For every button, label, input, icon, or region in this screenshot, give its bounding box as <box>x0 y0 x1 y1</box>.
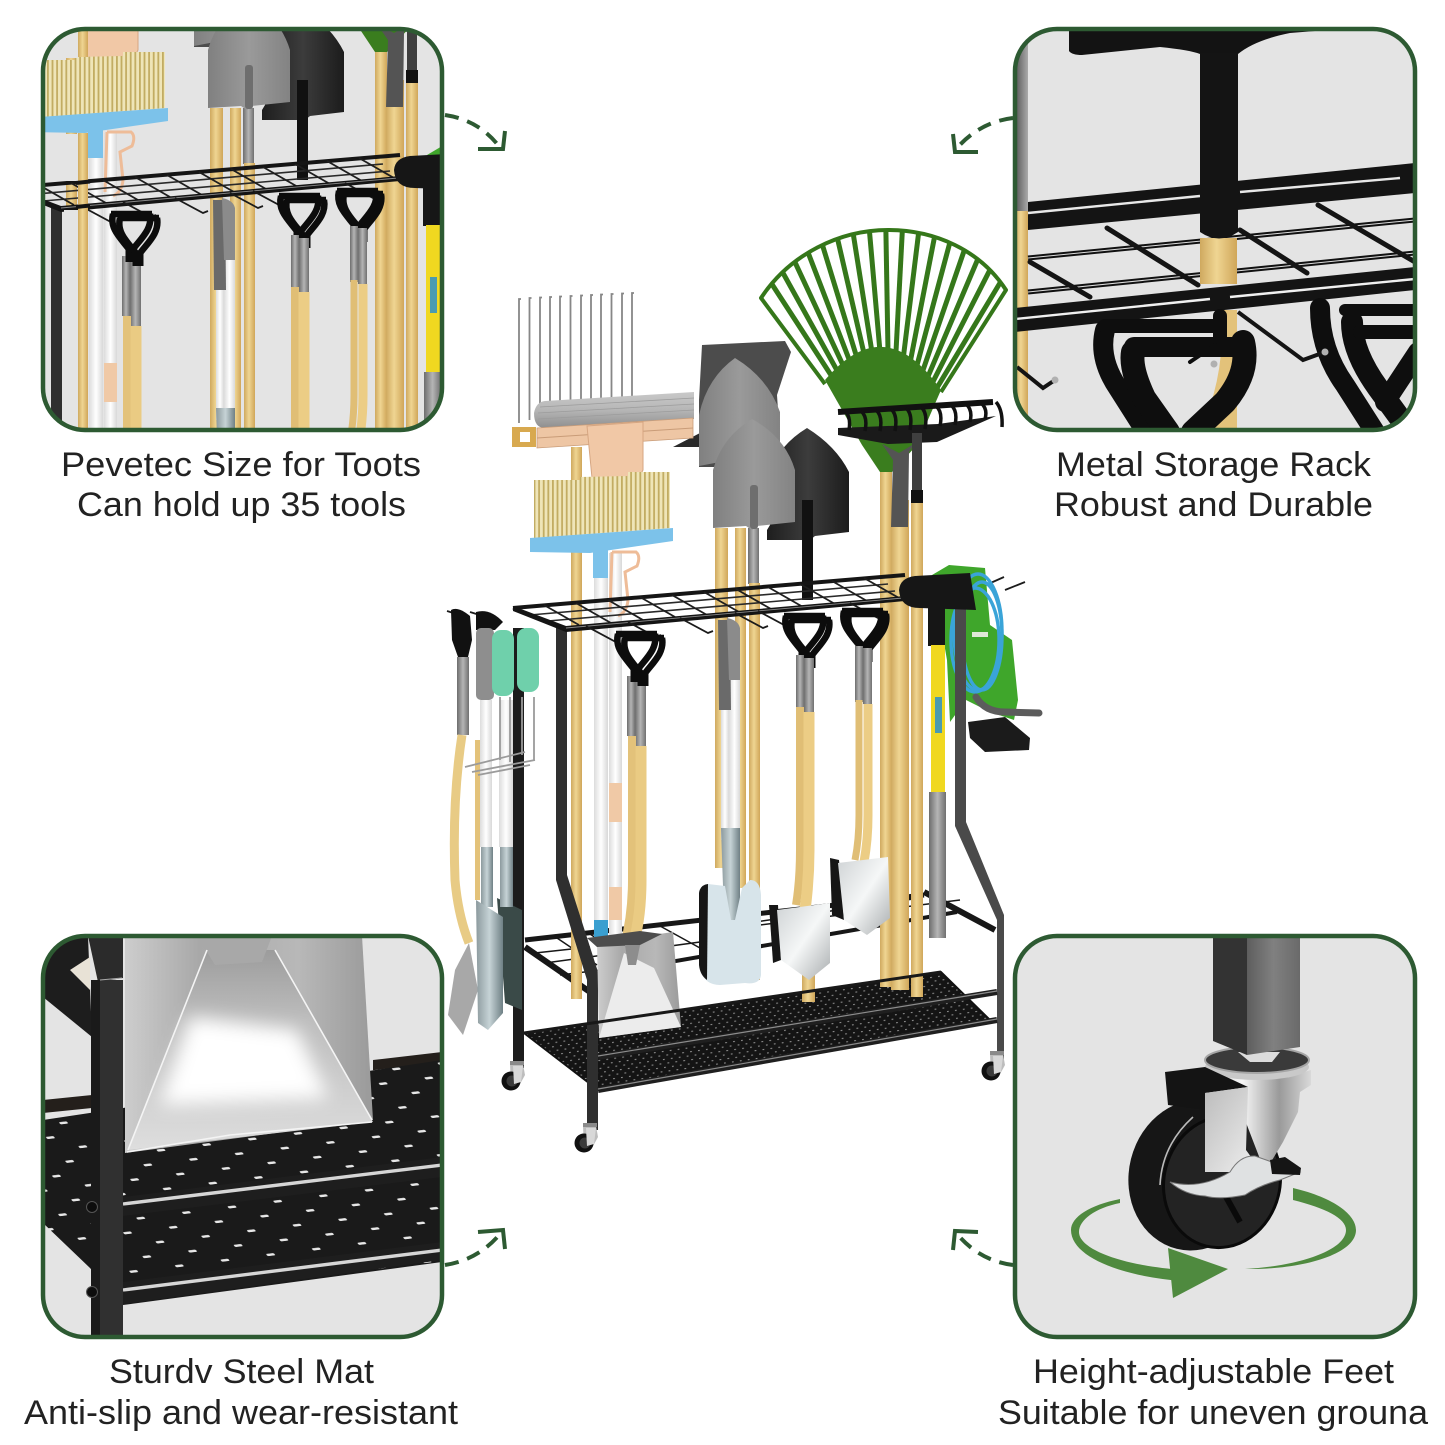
rear left upright <box>513 628 524 1068</box>
lower shelf front rail one <box>598 991 997 1057</box>
rake outline <box>761 230 1006 392</box>
panel border <box>1015 936 1415 1337</box>
front rail highlight <box>1015 279 1415 319</box>
peach mop clamp bar <box>537 418 693 448</box>
panel border <box>43 29 442 430</box>
back frame corner <box>43 936 92 1037</box>
front rail one highlight <box>123 1165 442 1204</box>
peach and white pole <box>609 553 622 938</box>
upper grey shovel <box>699 358 780 466</box>
caster right <box>982 1051 1005 1080</box>
front rail one <box>149 1168 432 1205</box>
pointed spade handle set <box>830 611 890 935</box>
shovel centre face <box>128 950 373 1150</box>
arrow: bottom left dashed <box>445 1230 505 1265</box>
caption: top left <box>61 446 421 524</box>
washer label <box>972 632 988 637</box>
green rotation arc right <box>1245 1188 1356 1269</box>
wooden pole section <box>1017 211 1028 415</box>
caption: bottom right: Height-adjustable Feet <box>1033 1353 1395 1391</box>
black rake head <box>838 402 1002 444</box>
rake fork neck <box>882 444 914 527</box>
panel: size detail top left <box>40 26 444 432</box>
shovel front <box>599 953 681 1038</box>
wooden pole in crop <box>78 29 88 430</box>
left hanging tool A <box>448 609 478 1035</box>
galvanised socket <box>721 828 740 935</box>
socket tray <box>587 931 662 947</box>
front rail <box>1015 267 1415 332</box>
center shovel: big square shovel with handles <box>587 634 681 1038</box>
rear rail highlight <box>373 1068 385 1070</box>
wheel face <box>1150 1104 1294 1260</box>
black bracket <box>899 573 976 610</box>
gold bracket <box>512 427 536 447</box>
D grip left <box>1103 316 1245 432</box>
panel border <box>1015 29 1415 430</box>
wood handle under rail <box>1212 310 1237 428</box>
rear mat rails <box>43 1052 442 1113</box>
blue broom head <box>530 528 673 578</box>
caster rear left <box>502 1061 525 1090</box>
wood below shaft <box>1200 238 1237 284</box>
light gap in back frame <box>70 957 90 990</box>
arrow: top right dashed <box>953 118 1013 152</box>
dark dustpan shovel <box>699 341 791 467</box>
caption: top left: Pevetec Size for Toots <box>61 446 421 484</box>
tall wooden poles <box>880 470 923 997</box>
wooden handle behind broom <box>571 447 582 999</box>
broom bristles <box>534 472 670 538</box>
arrow: bottom right dashed <box>953 1231 1013 1265</box>
green rotation arrowhead <box>1168 1248 1228 1298</box>
arrow: top left dashed <box>445 115 505 149</box>
rake solid base <box>825 347 941 472</box>
brake lever <box>1170 1156 1301 1198</box>
front rail of top shelf <box>513 596 905 632</box>
washer black foot <box>968 717 1030 752</box>
caster front <box>574 1123 598 1152</box>
front rail two highlight <box>123 1250 442 1290</box>
main product: tool storage rack <box>447 150 1053 1153</box>
back rail highlight <box>1028 178 1400 213</box>
perforated mat <box>43 1060 442 1305</box>
rake pole upper <box>911 433 923 503</box>
peach loop hook <box>610 552 639 616</box>
panel: metal rack close-up top right <box>1015 29 1418 432</box>
blue pole cap <box>594 920 608 938</box>
close-up scene <box>1015 936 1415 1337</box>
lower grey shovel <box>713 419 795 530</box>
mop roller <box>534 392 694 428</box>
caption: bottom left: Anti-slip and wear-resistant <box>24 1394 459 1432</box>
rear rails of lower shelf <box>524 972 941 1033</box>
square post <box>88 936 123 1337</box>
D grip right <box>1320 308 1418 432</box>
rake tines <box>771 232 1001 388</box>
shafts behind the lower grey shovel <box>715 528 760 980</box>
front rail two <box>123 1246 440 1297</box>
D grip <box>616 634 657 682</box>
panel: caster close-up bottom right <box>1015 936 1415 1337</box>
washer plate <box>1205 1047 1309 1080</box>
wheel spokes and rim <box>1160 1117 1240 1222</box>
yellow handled tool <box>928 608 946 938</box>
hanging hooks <box>447 577 1025 641</box>
black shaft <box>1200 53 1238 238</box>
caption: top right: Metal Storage Rack <box>1056 446 1372 484</box>
short spade handle set <box>769 616 831 1002</box>
grey hanger grips <box>718 620 731 710</box>
blue hose <box>951 574 1002 692</box>
comb rake tines <box>519 293 634 423</box>
left hanging tool B <box>475 611 522 1030</box>
shovel bright edges <box>127 950 372 1152</box>
front uprights <box>556 628 598 1130</box>
pressure washer <box>932 565 1039 752</box>
masks hiding the shifted pole <box>64 29 78 430</box>
swivel bell <box>1205 1070 1311 1172</box>
bolts <box>86 1202 98 1298</box>
front silver plate <box>1205 1087 1262 1172</box>
panel border <box>43 936 442 1337</box>
caption: bottom right <box>998 1353 1428 1432</box>
white broom pole <box>594 578 608 920</box>
black shovel shoulder <box>1069 31 1314 55</box>
shovel back <box>597 932 681 1038</box>
panel background and zoomed rack crop <box>45 31 440 428</box>
black shovel <box>767 428 849 600</box>
caption: bottom left <box>24 1353 459 1432</box>
lower shelf front rail two <box>598 1019 997 1090</box>
caption: bottom left: Sturdv Steel Mat <box>109 1353 375 1391</box>
top wire shelf <box>513 575 905 628</box>
close-up scene <box>43 936 442 1337</box>
rail pieces across the pole <box>76 182 90 207</box>
wire fork <box>465 697 535 775</box>
caption: top right: Robust and Durable <box>1054 486 1373 524</box>
shovel socket <box>208 938 271 958</box>
cross wires <box>1030 205 1415 297</box>
shovel reflection <box>160 1017 328 1105</box>
washer lance handle <box>976 697 1039 713</box>
square leg <box>1213 936 1300 1055</box>
green rotation arc left <box>1071 1199 1183 1281</box>
middle wire shelf <box>525 892 995 992</box>
shovel handles <box>627 676 635 736</box>
caption: top right <box>1054 446 1373 524</box>
caption: bottom right: Suitable for uneven grouna <box>998 1394 1428 1432</box>
caption: top left: Can hold up 35 tools <box>77 486 406 524</box>
close-up scene <box>1015 29 1418 432</box>
teal grip tools <box>465 628 539 907</box>
shovel back <box>125 936 373 1153</box>
flat shovel with twin white poles <box>699 618 761 985</box>
lower perforated steel shelf <box>524 972 990 1090</box>
hooks <box>1017 312 1325 388</box>
longitudinal wires <box>1028 220 1415 292</box>
black wedge behind roller <box>673 433 704 447</box>
right frame upright <box>955 606 1004 1060</box>
wheel tread <box>1113 1085 1277 1265</box>
fan leaf rake <box>718 150 1053 472</box>
hook end caps <box>1052 348 1328 384</box>
black shovel shaft <box>802 500 813 600</box>
black top plate <box>1165 1067 1248 1110</box>
flat blade <box>699 880 761 985</box>
right upright over washer <box>955 608 966 823</box>
panel: steel mat close-up bottom left <box>43 936 442 1337</box>
back rail <box>1028 163 1415 230</box>
grey pole section <box>1017 44 1028 211</box>
peach mop plate <box>587 422 643 478</box>
